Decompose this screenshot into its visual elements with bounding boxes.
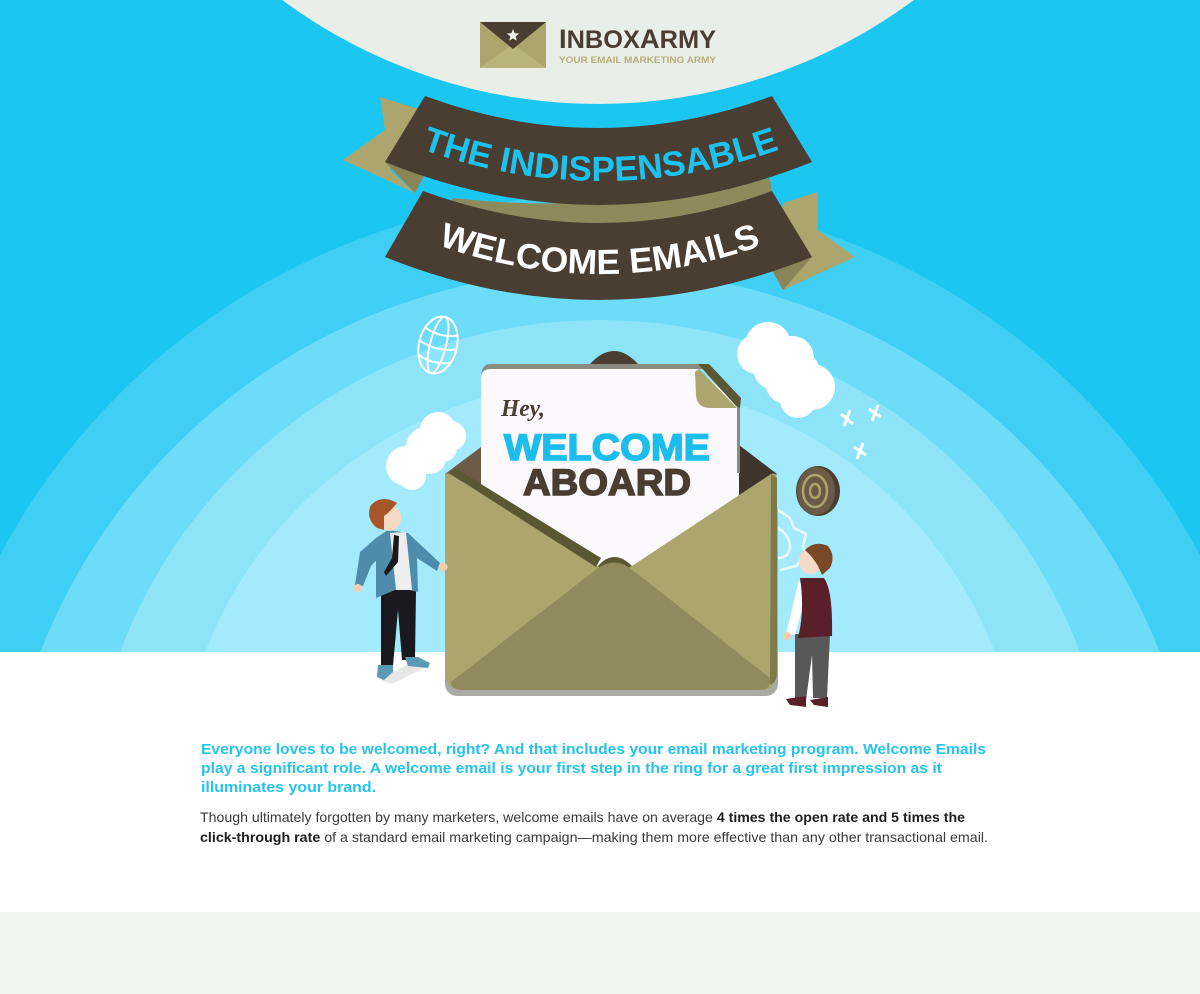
letter — [481, 364, 741, 600]
intro text — [201, 741, 986, 796]
logo: INBOXARMY — [559, 24, 716, 54]
body text — [200, 809, 988, 845]
intro text: play a significant role. A welcome email is your first step in the ring for a great first impression as it — [201, 760, 942, 777]
envelope front left flap — [445, 473, 614, 690]
body text: click-through rate of a standard email marketing campaign—making them more effective than any other transactional email. — [200, 829, 988, 845]
ribbon tail right — [772, 192, 855, 290]
ribbon band: welcome emails: WELCOME EMAILS — [444, 222, 758, 274]
flap dark edge — [449, 468, 601, 567]
envelope shadow — [445, 500, 778, 696]
title ribbon — [343, 96, 855, 300]
character: man in burgundy vest — [783, 544, 833, 707]
envelope back flap — [590, 351, 638, 364]
icon: gear — [778, 510, 806, 570]
ribbon band: the indispensable: THE INDISPENSABLE — [428, 126, 778, 181]
shirt — [390, 532, 412, 590]
letter text: hey: Hey, — [500, 396, 545, 422]
icon: globe — [413, 312, 463, 378]
sky background with concentric arcs — [0, 0, 1200, 652]
letter text: welcome: WELCOME — [504, 427, 710, 468]
intro text: illuminates your brand. — [201, 779, 376, 796]
envelope illustration — [445, 351, 778, 696]
ribbon connecting fold — [450, 178, 772, 240]
icon: cloud left — [386, 412, 466, 490]
hands — [354, 584, 362, 592]
sleeve — [786, 580, 806, 635]
tie — [384, 535, 399, 576]
intro text: Everyone loves to be welcomed, right? And that includes your email marketing program. Welcome Emails — [201, 741, 986, 758]
ribbon band: welcome emails — [385, 191, 812, 300]
letter text: aboard: ABOARD — [523, 462, 691, 503]
character: man in blue jacket — [354, 499, 448, 684]
head — [379, 505, 401, 531]
head — [799, 548, 823, 574]
envelope front right flap — [614, 474, 777, 690]
icon: cloud right — [737, 322, 835, 418]
ribbon band: the indispensable — [385, 96, 812, 205]
vest — [798, 578, 832, 638]
shoes — [377, 665, 393, 680]
logo — [480, 22, 717, 68]
icon: sparkles — [841, 405, 881, 459]
bottom footer panel — [0, 912, 1200, 994]
logo: YOUR EMAIL MARKETING ARMY — [559, 55, 717, 66]
body text: Though ultimately forgotten by many marketers, welcome emails have on average 4 times the open rate and 5 times the — [200, 809, 965, 825]
icon: at-sign coin — [796, 466, 840, 516]
shoes — [786, 696, 806, 707]
torso — [376, 530, 440, 598]
legs — [795, 634, 830, 700]
legs — [381, 590, 416, 666]
logo header dome — [282, 0, 914, 104]
shadow — [380, 664, 428, 684]
arm — [355, 538, 384, 586]
envelope bottom flap — [451, 562, 770, 690]
ribbon tail left — [343, 97, 425, 193]
